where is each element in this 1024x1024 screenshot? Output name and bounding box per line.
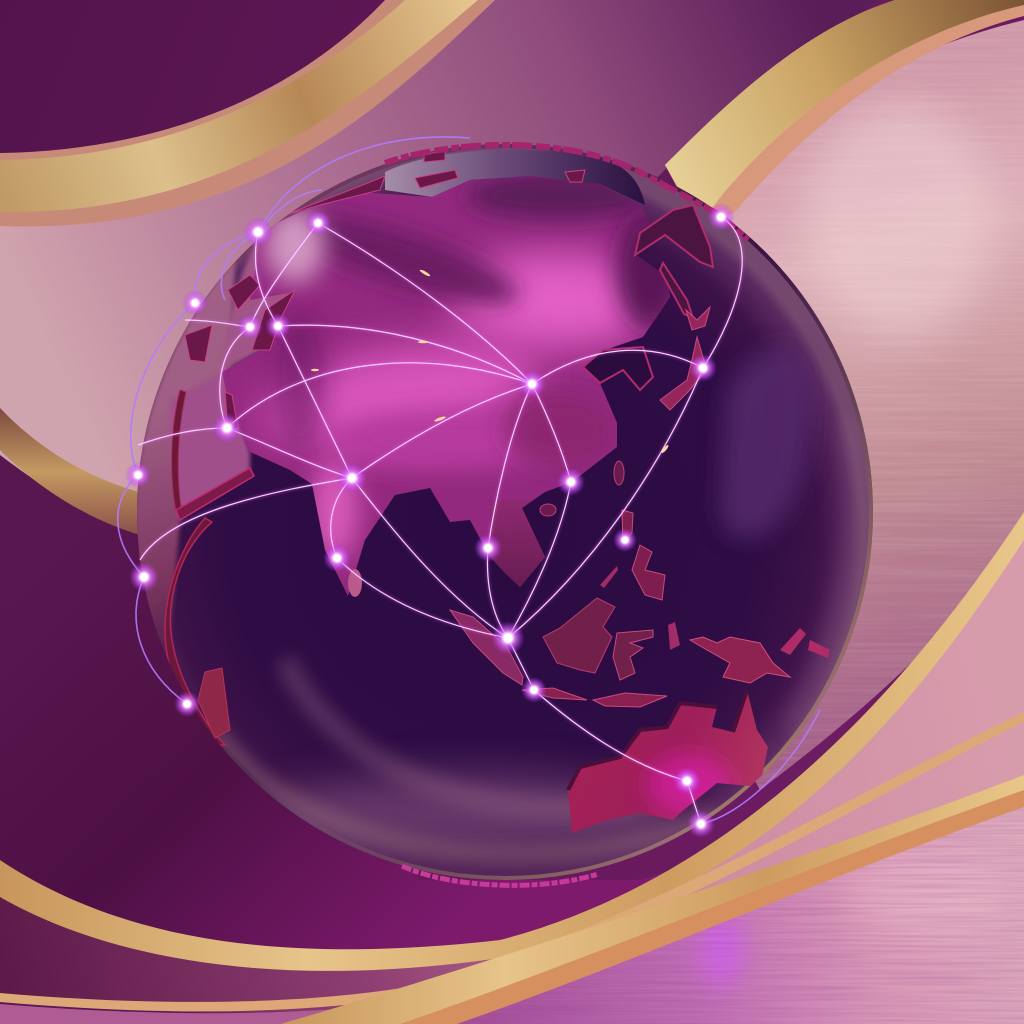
- land: Taiwan: [614, 461, 624, 485]
- land: Japan south: [660, 337, 707, 410]
- texture: brushed metal streaks right: [756, 56, 1024, 788]
- ribbon: gold top right: [665, 0, 1024, 230]
- land: Madagascar: [198, 668, 230, 738]
- land: Australia: [568, 694, 768, 833]
- land: arctic cap: [385, 150, 645, 205]
- land: west Asia and Africa upper: [170, 372, 250, 514]
- land: bottom rim coast: [402, 866, 598, 885]
- globe reflection right panel: [720, 346, 813, 539]
- land: Arabia coast: [176, 468, 254, 520]
- land: East Africa coast: [172, 390, 186, 514]
- land: upper left metal: [222, 212, 300, 372]
- ribbon: main gold bottom: [281, 775, 1024, 1024]
- background panel: dark purple left lower: [0, 455, 1024, 976]
- highlight: floor sheen: [850, 855, 1010, 935]
- land: Hainan: [540, 504, 556, 516]
- land: Australia north edge: [568, 690, 747, 790]
- texture: brushed streaks floor: [542, 808, 1024, 1024]
- globe reflection outer ring: [215, 730, 720, 855]
- background panel: light rose metal right: [600, 0, 1024, 790]
- highlight: right panel sheen: [805, 100, 995, 340]
- land: Eurasia bright metal: [222, 176, 670, 596]
- land: Sumatra: [450, 610, 523, 685]
- land: Borneo: [543, 598, 615, 673]
- globe reflection lower ring: [285, 660, 670, 809]
- land: top rim coast: [385, 145, 748, 240]
- network sparkles: [311, 269, 669, 454]
- background panel: pink lower sweep: [0, 530, 1024, 1013]
- globe reflection left crescent: [137, 262, 237, 642]
- globe reflection lower glow: [260, 773, 680, 857]
- ribbon: gold left middle: [0, 408, 150, 535]
- network arcs: [138, 217, 742, 824]
- globe: [118, 137, 873, 885]
- land: Korea: [583, 347, 653, 390]
- land: Philippines: [622, 510, 665, 600]
- network nodes: [125, 203, 735, 838]
- land: Africa outline: [165, 518, 225, 745]
- land: small islands: [600, 566, 680, 650]
- land: Hokkaido: [686, 307, 710, 330]
- background panel: rose metal band: [0, 0, 880, 560]
- network outer arcs: [118, 137, 820, 824]
- land: New Guinea: [690, 637, 790, 683]
- land: Arctic islands: [185, 150, 585, 430]
- highlight: violet floor reflection: [700, 912, 744, 988]
- ribbon: gold top left: [0, 0, 495, 226]
- globe sphere: [137, 144, 873, 880]
- land: Java and lesser islands: [522, 688, 667, 707]
- land: New Guinea islands: [780, 628, 830, 658]
- globe reflection right inner band: [790, 420, 856, 730]
- ribbon: gold lower sweep: [0, 512, 1024, 971]
- globe rim: [139, 146, 871, 878]
- land: Sri Lanka: [348, 569, 362, 597]
- ribbon: thin gold lower: [0, 712, 1024, 1011]
- land: Sakhalin and Kamchatka outlines: [635, 205, 713, 318]
- background panel: lilac floor: [440, 790, 1024, 1024]
- land: Sulawesi: [613, 630, 653, 680]
- background panel: bottom left strip: [0, 1004, 380, 1024]
